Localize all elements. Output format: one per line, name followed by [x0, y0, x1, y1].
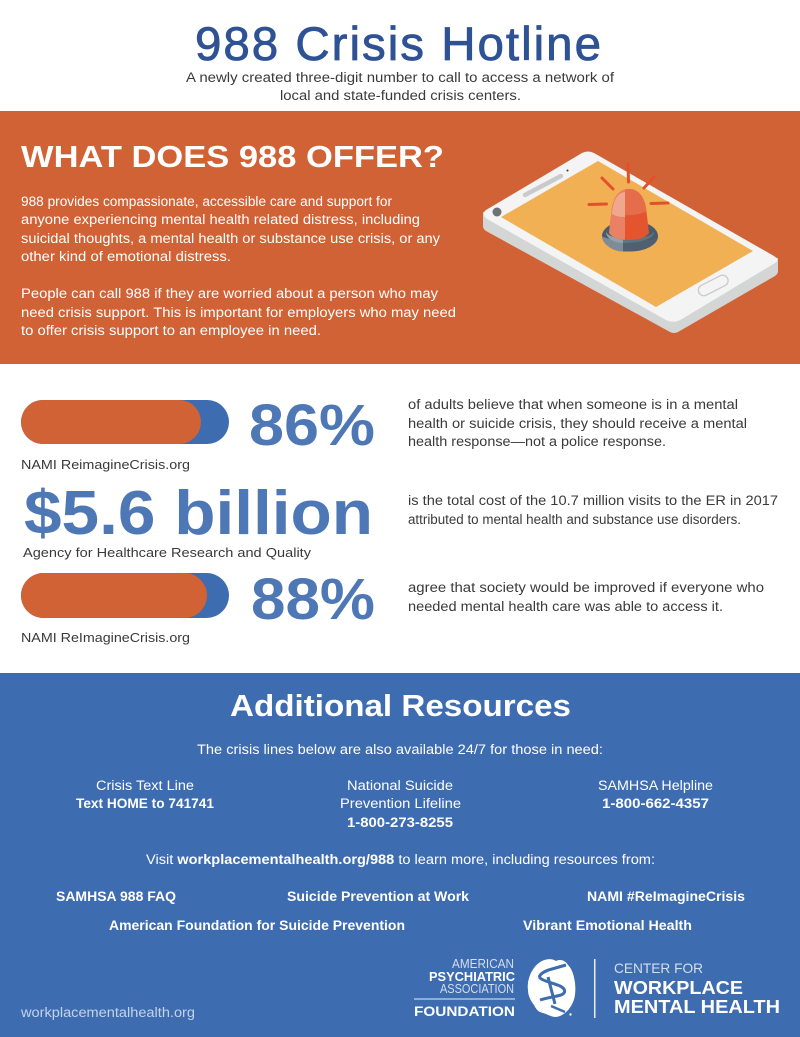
icon: smartphone with siren — [483, 152, 778, 333]
description: agree that society would be improved if everyone who — [408, 580, 764, 595]
description — [408, 397, 747, 449]
resource links: SAMHSA 988 FAQ — [56, 889, 176, 904]
description: health or suicide crisis, they should receive a mental — [408, 416, 747, 431]
logo: american psychiatric association foundation: PSYCHIATRIC — [429, 969, 516, 984]
description: health response—not a police response. — [408, 434, 666, 449]
description — [408, 580, 764, 614]
progress bar: 88 percent — [21, 573, 229, 618]
subtitle: local and state-funded crisis centers. — [280, 88, 521, 103]
logo: center for workplace mental health — [614, 960, 780, 1017]
crisis line: suicide prevention lifeline — [340, 778, 461, 830]
text block: description: anyone experiencing mental health related distress, including — [21, 212, 420, 227]
value: 88%: 88% — [251, 567, 375, 632]
progress bar: 86 percent — [21, 400, 229, 444]
siren — [589, 164, 668, 252]
panel: what does 988 offer — [0, 111, 800, 364]
text block: description: 988 provides compassionate, accessible care and support for — [21, 194, 392, 209]
crisis line: suicide prevention lifeline: 1-800-273-8255 — [347, 815, 454, 830]
resource links — [56, 889, 745, 933]
stat: 5.6 billion — [23, 479, 778, 560]
text block: description: other kind of emotional distress. — [21, 249, 231, 264]
logo: brain and staff emblem — [528, 959, 575, 1017]
text block: employers: need crisis support. This is important for employers who may need — [21, 305, 456, 320]
heading: additional resources: Additional Resources — [230, 688, 571, 723]
logo: american psychiatric association foundation: ASSOCIATION — [440, 982, 514, 996]
stat: 86 percent — [21, 393, 747, 472]
text block: employers: to offer crisis support to an employee in need. — [21, 323, 321, 338]
stat: 88 percent — [21, 567, 764, 645]
logo: center for workplace mental health: WORKPLACE — [614, 978, 743, 998]
crisis line: suicide prevention lifeline: Prevention Lifeline — [340, 796, 461, 811]
subtitle — [186, 70, 614, 103]
crisis line: text line: Text HOME to 741741 — [76, 796, 214, 811]
heading: what does 988 offer: WHAT DOES 988 OFFER? — [21, 139, 444, 174]
logo: american psychiatric association foundation — [414, 957, 516, 1019]
resource links: American Foundation for Suicide Prevention — [109, 918, 405, 933]
logo: american psychiatric association foundation: FOUNDATION — [414, 1003, 515, 1019]
source: Agency for Healthcare Research and Quality — [23, 545, 312, 560]
source: NAMI ReImagineCrisis.org — [21, 630, 190, 645]
description: attributed to mental health and substance use disorders. — [408, 512, 741, 527]
resource links: Vibrant Emotional Health — [523, 918, 692, 933]
divider — [594, 959, 596, 1018]
crisis line: suicide prevention lifeline: National Suicide — [347, 778, 453, 793]
logo: american psychiatric association foundation: AMERICAN — [452, 957, 514, 971]
panel: additional resources — [0, 673, 800, 1037]
description: is the total cost of the 10.7 million visits to the ER in 2017 — [408, 493, 778, 508]
visit text: Visit workplacementalhealth.org/988 to learn more, including resources from: — [146, 852, 655, 867]
crisis line: samhsa helpline: SAMHSA Helpline — [598, 778, 713, 793]
website: workplacementalhealth.org — [20, 1005, 195, 1020]
resource links: NAMI #ReImagineCrisis — [587, 889, 745, 904]
subtitle: A newly created three-digit number to call to access a network of — [186, 70, 614, 85]
text block: description: suicidal thoughts, a mental health or substance use crisis, or any — [21, 231, 440, 246]
logo: center for workplace mental health: MENTAL HEALTH — [614, 997, 780, 1017]
text block: employers — [21, 286, 456, 338]
description: of adults believe that when someone is in a mental — [408, 397, 738, 412]
title: 988 Crisis Hotline — [195, 18, 601, 71]
description: needed mental health care was able to access it. — [408, 599, 723, 614]
resource links: Suicide Prevention at Work — [287, 889, 470, 904]
description — [408, 493, 778, 527]
value: 86%: 86% — [249, 393, 375, 458]
crisis line: samhsa helpline — [598, 778, 713, 811]
logo: center for workplace mental health: CENTER FOR — [614, 960, 703, 976]
crisis line: samhsa helpline: 1-800-662-4357 — [602, 796, 709, 811]
text block: employers: People can call 988 if they are worried about a person who may — [21, 286, 438, 301]
intro text: The crisis lines below are also available 24/7 for those in need: — [197, 742, 603, 757]
value: $5.6 billion: $5.6 billion — [24, 479, 373, 548]
text block: description — [21, 194, 440, 264]
crisis line: text line — [76, 778, 214, 811]
source: NAMI ReimagineCrisis.org — [21, 457, 190, 472]
crisis line: text line: Crisis Text Line — [96, 778, 194, 793]
